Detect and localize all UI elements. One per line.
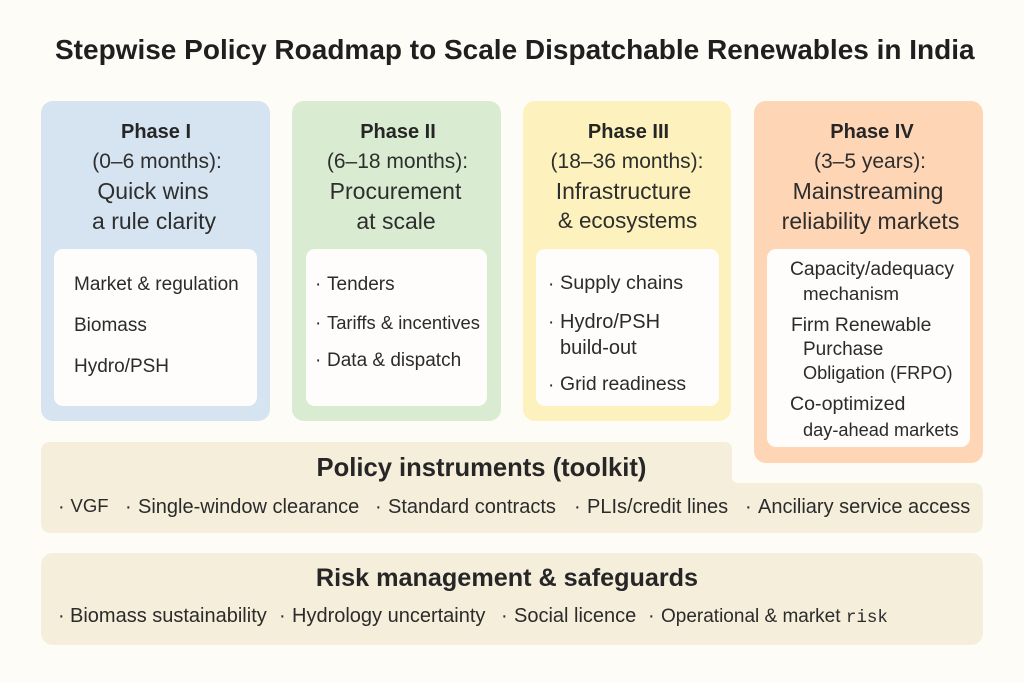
title: Stepwise Policy Roadmap to Scale Dispatchable Renewables in India xyxy=(55,34,975,65)
phase III timing: (18–36 months): xyxy=(551,150,703,173)
toolkit heading: Policy instruments (toolkit) xyxy=(317,454,646,482)
risk items: Social licence xyxy=(514,605,636,627)
toolkit items: · xyxy=(58,496,65,518)
phase III items: build-out xyxy=(560,337,637,359)
phase II theme line 2: at scale xyxy=(356,208,436,234)
phase I theme line 2: a rule clarity xyxy=(92,208,216,234)
risk items: · xyxy=(58,605,65,627)
risk items: · xyxy=(279,605,286,627)
phase I items xyxy=(54,249,257,406)
phase IV items: Firm Renewable xyxy=(791,315,931,336)
toolkit items: Single-window clearance xyxy=(138,496,359,518)
phase I heading: Phase I xyxy=(121,121,191,143)
panel: phase II xyxy=(292,101,501,421)
phase II theme: Procurement xyxy=(330,178,461,204)
phase I items: Biomass xyxy=(74,315,147,336)
risk items: · xyxy=(501,605,508,627)
phase III items: Hydro/PSH xyxy=(560,311,660,333)
phase IV items: Obligation (FRPO) xyxy=(803,363,953,383)
toolkit items: · xyxy=(375,496,382,518)
phase III theme line 2: & ecosystems xyxy=(558,208,697,233)
phase II items: Data & dispatch xyxy=(327,350,461,371)
phase III items: · xyxy=(548,274,554,295)
phase III theme: Infrastructure xyxy=(556,178,691,204)
phase IV theme line 2: reliability markets xyxy=(782,208,959,234)
phase III heading: Phase III xyxy=(588,121,669,143)
phase III items: Grid readiness xyxy=(560,373,686,395)
phase I items: Hydro/PSH xyxy=(74,356,169,377)
phase IV items xyxy=(767,249,970,447)
panel: policy instruments xyxy=(41,442,983,533)
phase III items xyxy=(536,249,719,406)
panel: risk management xyxy=(41,553,983,645)
phase II heading: Phase II xyxy=(360,121,436,143)
toolkit items: · xyxy=(745,496,752,518)
toolkit items: PLIs/credit lines xyxy=(587,496,728,518)
phase III items: Supply chains xyxy=(560,272,683,294)
risk items: Operational & market risk xyxy=(661,606,888,628)
toolkit items xyxy=(58,495,970,518)
risk heading: Risk management & safeguards xyxy=(316,564,698,592)
panel: phase IV xyxy=(754,101,983,463)
toolkit items: Standard contracts xyxy=(388,496,556,518)
toolkit items: · xyxy=(125,496,132,518)
toolkit items: Anciliary service access xyxy=(758,496,970,518)
toolkit items: · xyxy=(574,496,581,518)
phase IV heading: Phase IV xyxy=(830,121,914,143)
risk items: Biomass sustainability xyxy=(70,605,267,627)
phase I timing: (0–6 months): xyxy=(92,150,222,173)
panel: phase III xyxy=(523,101,731,421)
phase II items: · xyxy=(315,350,321,371)
risk items: Hydrology uncertainty xyxy=(292,605,485,627)
phase IV items: Capacity/adequacy xyxy=(790,259,954,280)
panel: phase I xyxy=(41,101,270,421)
phase IV items: Co-optimized xyxy=(790,393,905,415)
phase IV items: Purchase xyxy=(803,339,883,360)
phase III items: · xyxy=(548,312,554,333)
phase IV items: day-ahead markets xyxy=(803,420,959,440)
phase IV timing: (3–5 years): xyxy=(814,150,926,173)
phase II timing: (6–18 months): xyxy=(327,150,468,173)
phase II items: Tenders xyxy=(327,274,395,295)
phase I items: Market & regulation xyxy=(74,274,239,295)
phase II items: Tariffs & incentives xyxy=(327,312,480,333)
phase III items: · xyxy=(548,375,554,396)
toolkit items: VGF xyxy=(70,495,109,516)
phase II items xyxy=(306,249,487,406)
phase I theme: Quick wins xyxy=(97,178,209,204)
risk items: · xyxy=(648,605,655,627)
risk items xyxy=(58,605,888,628)
phase IV theme: Mainstreaming xyxy=(793,178,943,204)
phase II items: · xyxy=(315,313,321,334)
phase IV items: mechanism xyxy=(803,283,899,304)
phase II items: · xyxy=(315,274,321,295)
